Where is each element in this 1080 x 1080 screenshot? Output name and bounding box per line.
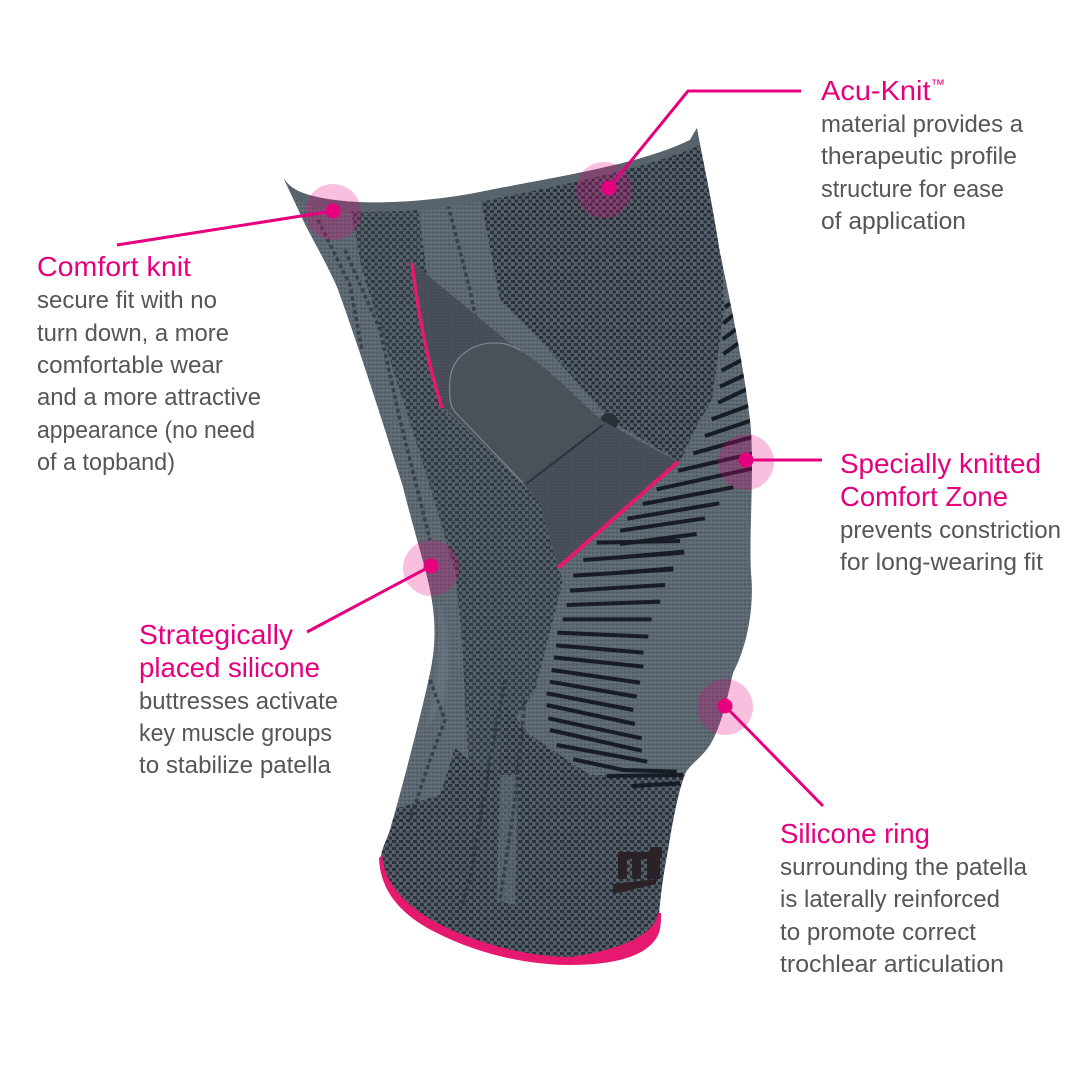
marker dot <box>424 558 438 574</box>
body text <box>821 111 1023 235</box>
top band <box>283 128 700 212</box>
flap tongue <box>450 343 603 483</box>
central dark knit panel <box>350 205 563 790</box>
heading <box>840 448 1041 512</box>
heading: ™ <box>931 76 945 92</box>
leader line <box>746 458 822 462</box>
heading: Comfort Zone <box>840 481 1008 512</box>
heading: placed silicone <box>139 652 320 683</box>
marker dot <box>738 452 754 468</box>
body text: key muscle groups <box>139 720 332 747</box>
leader line <box>609 91 801 188</box>
body text: turn down, a more <box>37 320 229 347</box>
body text: prevents constriction <box>840 517 1061 544</box>
marker dot <box>718 698 732 714</box>
heading: Silicone ring <box>780 818 930 849</box>
body text <box>840 517 1061 576</box>
body text: structure for ease <box>821 176 1004 203</box>
body text: trochlear articulation <box>780 951 1004 978</box>
body text: surrounding the patella <box>780 854 1027 881</box>
photo: knee support sleeve <box>270 120 770 990</box>
pink edge lower <box>558 462 678 568</box>
lower dark knit band <box>381 710 685 957</box>
body text: secure fit with no <box>37 287 217 314</box>
callout: Silicone ring <box>697 679 1027 978</box>
body text: to promote correct <box>780 919 976 946</box>
marker halo <box>718 434 774 490</box>
knee shading <box>428 612 448 721</box>
sleeve body <box>283 128 752 957</box>
flap fold <box>526 425 603 484</box>
marker halo <box>576 162 632 218</box>
callout: Acu-Knit <box>576 75 1023 235</box>
body text <box>37 287 261 476</box>
body text: for long-wearing fit <box>840 549 1043 576</box>
red hem <box>379 855 661 965</box>
lighter knit channels <box>497 775 518 905</box>
upper right dark knit panel <box>477 130 724 462</box>
marker halo <box>697 679 753 735</box>
callout: Comfort knit <box>37 184 361 476</box>
body text <box>780 854 1027 978</box>
marker dot <box>602 180 616 196</box>
leader line <box>725 706 823 806</box>
marker dot <box>326 204 340 218</box>
heading: Strategically <box>139 619 293 650</box>
marker halo <box>305 184 361 240</box>
flap shape <box>412 262 680 568</box>
callout: Specially knitted Comfort Zone <box>718 434 1061 576</box>
body text: of a topband) <box>37 449 175 476</box>
body text: appearance (no need <box>37 417 255 444</box>
body text <box>139 688 338 779</box>
tongue edge highlight <box>450 343 523 483</box>
leader line <box>307 566 431 632</box>
body text: to stabilize patella <box>139 752 331 779</box>
body text: is laterally reinforced <box>780 886 1000 913</box>
heading: Comfort knit <box>37 251 191 282</box>
body text: comfortable wear <box>37 352 223 379</box>
body text: buttresses activate <box>139 688 338 715</box>
dark zigzag lines <box>318 205 525 910</box>
heading: Specially knitted <box>840 448 1041 479</box>
body text: of application <box>821 208 966 235</box>
heading <box>139 619 320 683</box>
logo mark <box>613 847 662 894</box>
callout: Strategically placed silicone <box>139 540 459 779</box>
rivet <box>600 413 618 431</box>
body text: therapeutic profile <box>821 143 1017 170</box>
pink edge left <box>412 263 442 408</box>
knit stripes: comfort zone <box>547 541 684 786</box>
strap flap <box>412 262 680 568</box>
heading: Acu-Knit <box>821 75 927 106</box>
body text: and a more attractive <box>37 384 261 411</box>
body text: material provides a <box>821 111 1023 138</box>
leader line <box>117 211 333 245</box>
marker halo <box>403 540 459 596</box>
